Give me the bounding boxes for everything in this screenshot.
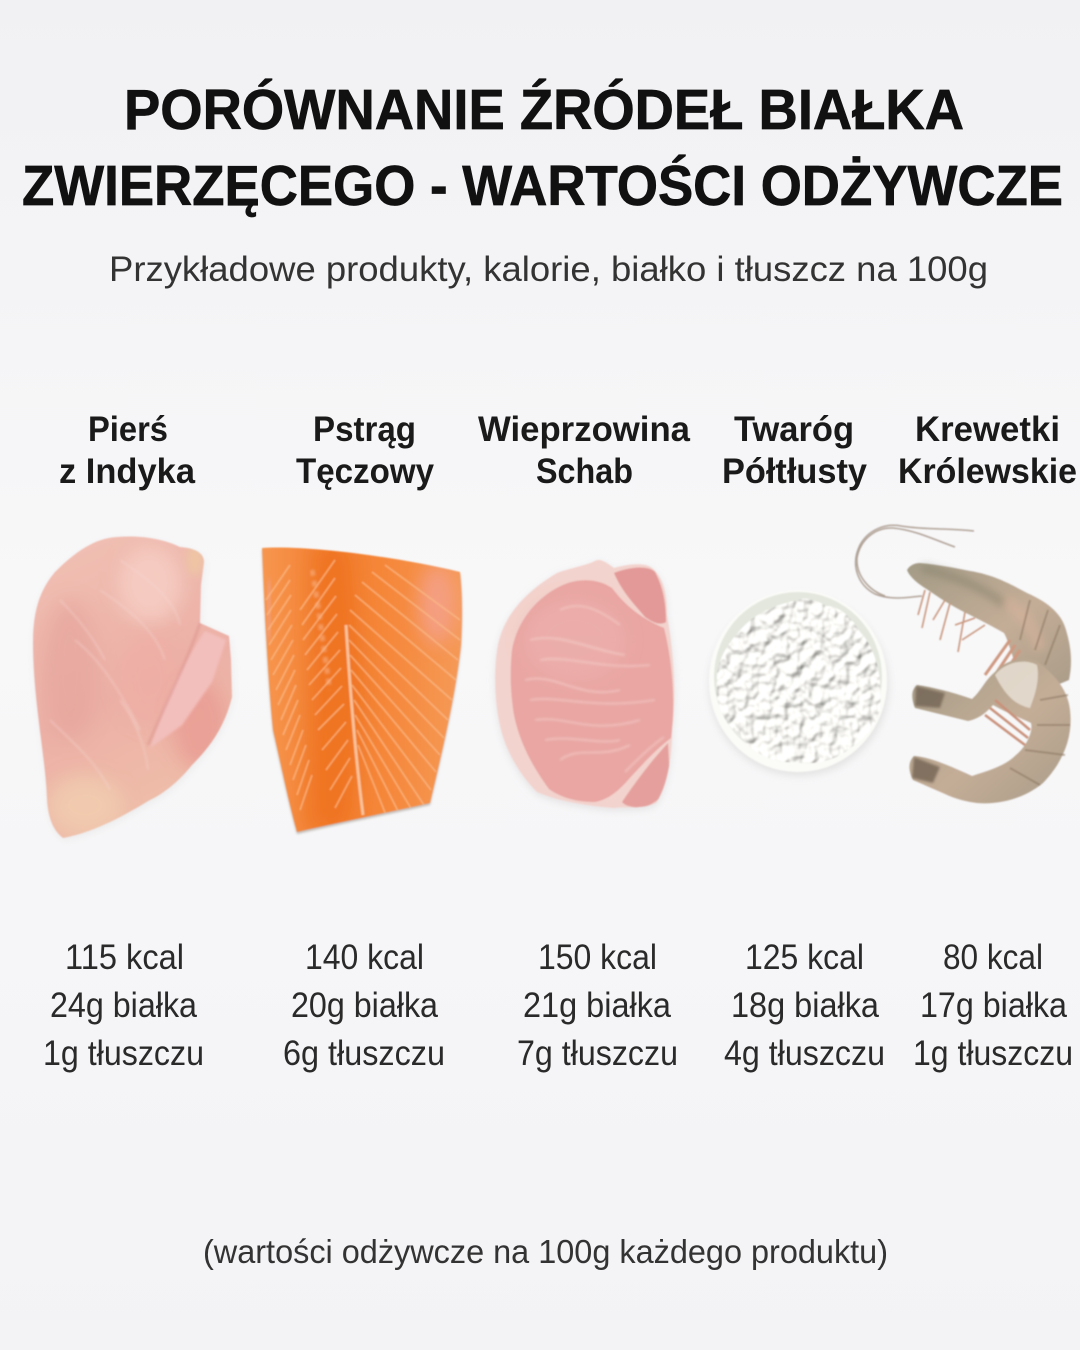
nutrition values: 150 kcal — [538, 938, 657, 977]
nutrition values: 17g białka — [920, 986, 1067, 1025]
heading: Twaróg Półtłusty — [722, 410, 868, 491]
heading: Pierś z Indyka — [59, 410, 196, 491]
photo: bowl of cottage cheese — [708, 590, 889, 776]
footnote: (wartości odżywcze na 100g każdego produktu) — [203, 1233, 888, 1270]
heading: Krewetki Królewskie: Królewskie — [898, 452, 1077, 491]
nutrition values: 80 kcal — [943, 938, 1043, 977]
lower lobe — [622, 743, 670, 808]
nutrition values — [43, 938, 204, 1073]
tenderloin strip — [150, 631, 226, 748]
heading: Krewetki Królewskie — [898, 410, 1077, 491]
nutrition values: 140 kcal — [305, 938, 424, 977]
heading: Twaróg Półtłusty: Półtłusty — [722, 452, 868, 491]
nutrition values: 6g tłuszczu — [283, 1034, 445, 1073]
heading: Krewetki Królewskie: Krewetki — [915, 410, 1060, 449]
column: pork loin — [478, 410, 691, 1073]
column: king prawns — [856, 410, 1077, 1073]
nutrition values — [283, 938, 445, 1073]
heading: Wieprzowina Schab — [478, 410, 691, 491]
heading: Pstrąg Tęczowy: Tęczowy — [296, 452, 434, 491]
title — [22, 78, 1063, 218]
column: turkey breast — [33, 410, 233, 1073]
nutrition values: 21g białka — [523, 986, 671, 1025]
heading: Wieprzowina Schab: Wieprzowina — [478, 410, 691, 449]
flesh lines — [266, 560, 460, 820]
nutrition values: 7g tłuszczu — [517, 1034, 678, 1073]
heading: Pstrąg Tęczowy — [296, 410, 434, 491]
nutrition values — [517, 938, 678, 1073]
heading: Wieprzowina Schab: Schab — [536, 452, 633, 491]
nutrition values: 24g białka — [50, 986, 197, 1025]
upper lobe — [614, 568, 666, 624]
lean meat — [511, 580, 673, 802]
photo: two raw prawns — [856, 525, 1071, 803]
subtitle: Przykładowe produkty, kalorie, białko i tłuszcz na 100g — [109, 250, 988, 289]
nutrition values: 18g białka — [731, 986, 879, 1025]
nutrition values — [913, 938, 1073, 1073]
photo: raw turkey breast — [33, 537, 233, 841]
heading: Pierś z Indyka: Pierś — [88, 410, 168, 449]
title: PORÓWNANIE ŹRÓDEŁ BIAŁKA — [124, 78, 964, 142]
heading: Twaróg Półtłusty: Twaróg — [734, 410, 854, 449]
nutrition values — [724, 938, 885, 1073]
central spine — [346, 625, 363, 815]
antennae — [856, 525, 974, 598]
nutrition values: 115 kcal — [65, 938, 184, 977]
nutrition values: 4g tłuszczu — [724, 1034, 885, 1073]
lower prawn — [909, 659, 1071, 803]
upper prawn — [907, 563, 1071, 690]
nutrition values: 1g tłuszczu — [43, 1034, 204, 1073]
column: cottage cheese — [708, 410, 889, 1073]
heading: Pstrąg Tęczowy: Pstrąg — [313, 410, 416, 449]
nutrition values: 125 kcal — [745, 938, 864, 977]
photo: pork chop — [495, 560, 674, 811]
photo: trout fillet — [262, 545, 462, 834]
nutrition values: 20g białka — [291, 986, 438, 1025]
heading: Pierś z Indyka: z Indyka — [59, 452, 196, 491]
column: rainbow trout — [262, 410, 462, 1073]
